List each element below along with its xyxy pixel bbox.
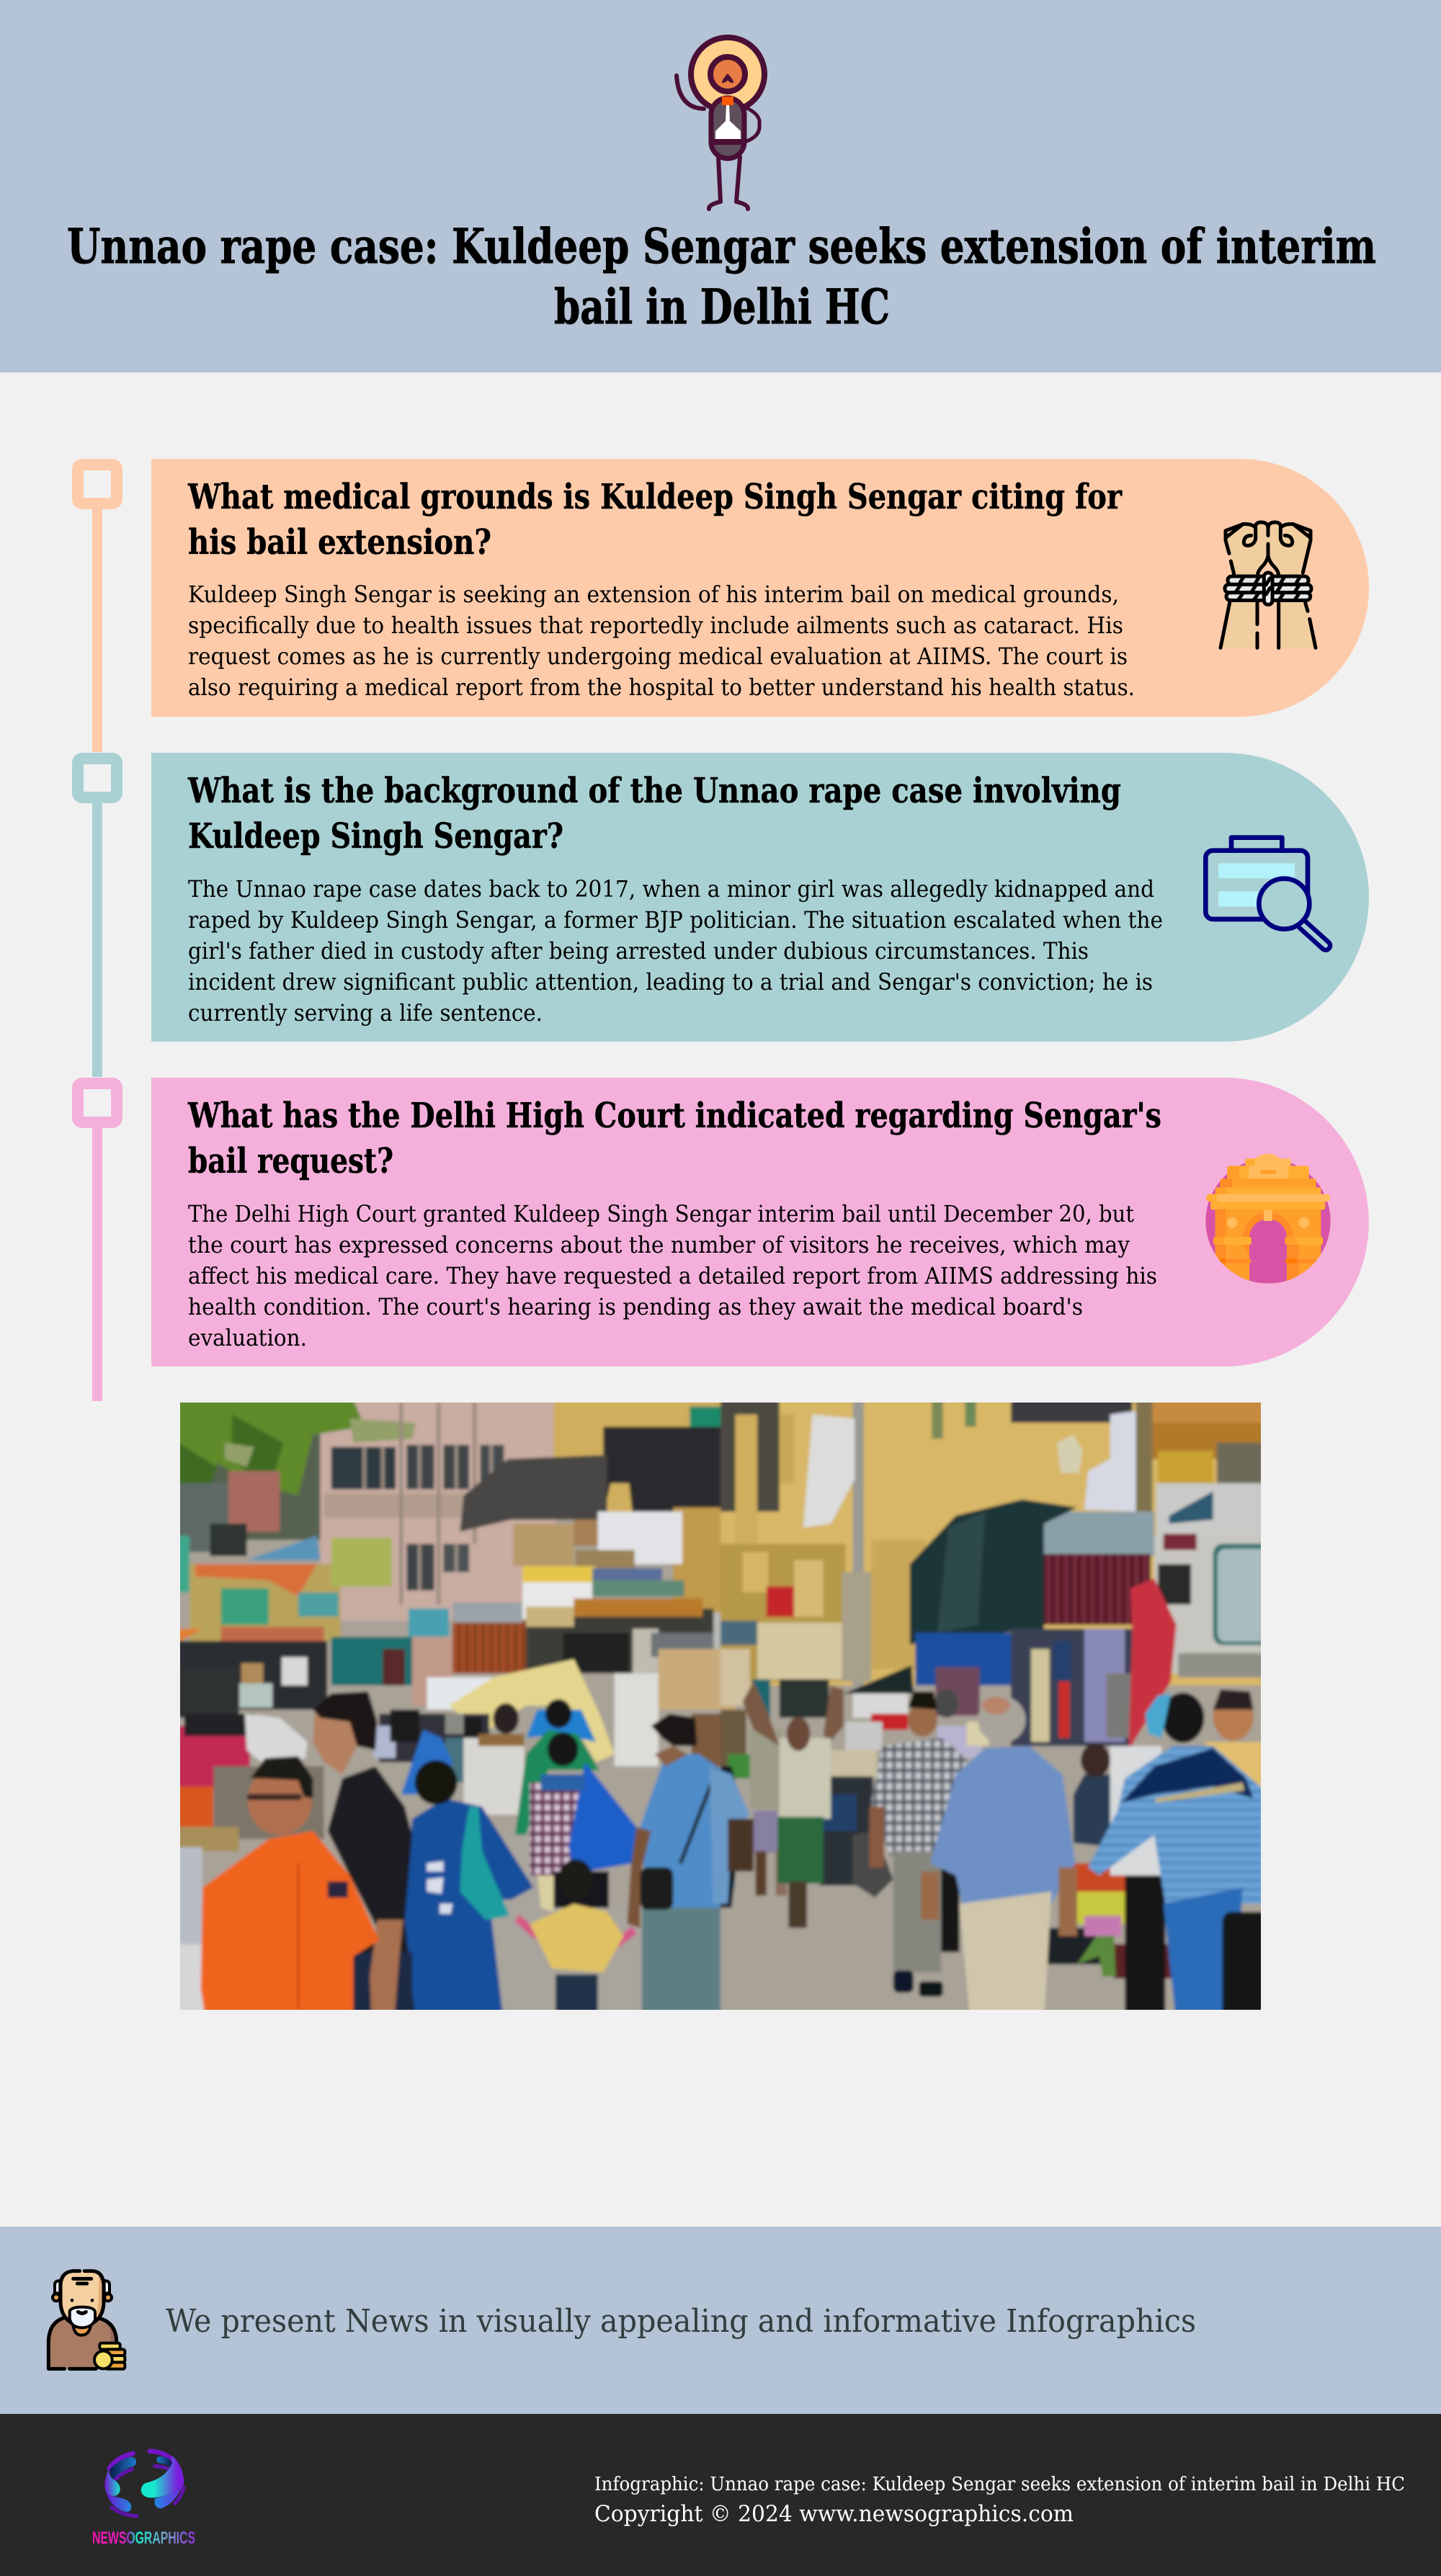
- text block: Delhi High Court: the court has expressed concerns about the number of visitors he receives, which may: [188, 1231, 1130, 1258]
- photo right half: [710, 1390, 1280, 2025]
- panel: background of the case: [151, 753, 1369, 1042]
- text block: medical grounds: Kuldeep Singh Sengar is seeking an extension of his interim bail on medical grounds,: [188, 581, 1119, 608]
- photo: crowded market street: [180, 1403, 1261, 2010]
- heading: Delhi High Court: bail request?: [188, 1141, 393, 1181]
- logo: Newsographics: NEWSOGRAPHICS: [92, 2528, 195, 2548]
- icon: old man with coins: [48, 2271, 125, 2369]
- timeline step 3 marker: [72, 1078, 122, 1401]
- text block: medical grounds: request comes as he is currently undergoing medical evaluation at AIIMS. The court is: [188, 643, 1128, 670]
- text block: Delhi High Court: [188, 1200, 1157, 1351]
- heading: medical grounds: his bail extension?: [188, 522, 491, 563]
- text block: medical grounds: specifically due to health issues that reportedly include ailments such as cataract. His: [188, 612, 1123, 639]
- timeline step 2 marker: [72, 753, 122, 1077]
- icon: man with round hat: [677, 37, 764, 209]
- text block: medical grounds: also requiring a medical report from the hospital to better understand his health status.: [188, 674, 1135, 701]
- heading: medical grounds: What medical grounds is Kuldeep Singh Sengar citing for: [187, 477, 1123, 517]
- logo: Newsographics: [92, 2451, 195, 2548]
- title: bail in Delhi HC: [554, 279, 890, 335]
- footer credit text: [594, 2474, 1405, 2527]
- heading: Delhi High Court: What has the Delhi High Court indicated regarding Sengar's: [187, 1096, 1161, 1136]
- timeline step 1 marker: [72, 459, 122, 752]
- text block: medical grounds: [188, 581, 1135, 701]
- icon: tied hands: [1221, 522, 1316, 648]
- text block: background of the case: raped by Kuldeep Singh Sengar, a former BJP politician. The situation escalated when the: [188, 906, 1163, 934]
- text block: background of the case: incident drew significant public attention, leading to a trial and Sengar's conviction; he is: [188, 968, 1153, 996]
- text block: background of the case: currently serving a life sentence.: [188, 999, 543, 1027]
- footer: [0, 2414, 1441, 2576]
- heading: medical grounds: [187, 477, 1123, 563]
- panel: medical grounds: [151, 459, 1369, 717]
- band: tagline: [0, 2227, 1441, 2414]
- header band: [0, 0, 1441, 372]
- text block: background of the case: The Unnao rape case dates back to 2017, when a minor girl was allegedly kidnapped and: [188, 875, 1154, 903]
- text block: background of the case: girl's father died in custody after being arrested under dubious circumstances. This: [188, 937, 1089, 965]
- tagline text: We present News in visually appealing and informative Infographics: [166, 2303, 1196, 2340]
- text block: Delhi High Court: affect his medical care. They have requested a detailed report from AIIMS addressing his: [188, 1262, 1157, 1289]
- text block: Delhi High Court: The Delhi High Court granted Kuldeep Singh Sengar interim bail until December 20, but: [188, 1200, 1134, 1227]
- footer credit text: Infographic: Unnao rape case: Kuldeep Sengar seeks extension of interim bail in Delhi HC: [594, 2474, 1405, 2495]
- heading: background of the case: What is the background of the Unnao rape case involving: [187, 771, 1121, 811]
- icon: briefcase with magnifier: [1205, 838, 1326, 946]
- panel: Delhi High Court: [151, 1078, 1369, 1367]
- heading: background of the case: Kuldeep Singh Sengar?: [188, 816, 563, 857]
- text block: background of the case: [188, 875, 1163, 1027]
- heading: background of the case: [187, 771, 1121, 857]
- text block: Delhi High Court: health condition. The court's hearing is pending as they await the medical board's: [188, 1293, 1083, 1320]
- heading: Delhi High Court: [187, 1096, 1161, 1181]
- title: [67, 218, 1376, 335]
- photo left half: [166, 1390, 736, 2025]
- icon: India Gate: [1205, 1154, 1331, 1287]
- footer credit text: Copyright © 2024 www.newsographics.com: [594, 2501, 1074, 2527]
- text block: Delhi High Court: evaluation.: [188, 1324, 307, 1351]
